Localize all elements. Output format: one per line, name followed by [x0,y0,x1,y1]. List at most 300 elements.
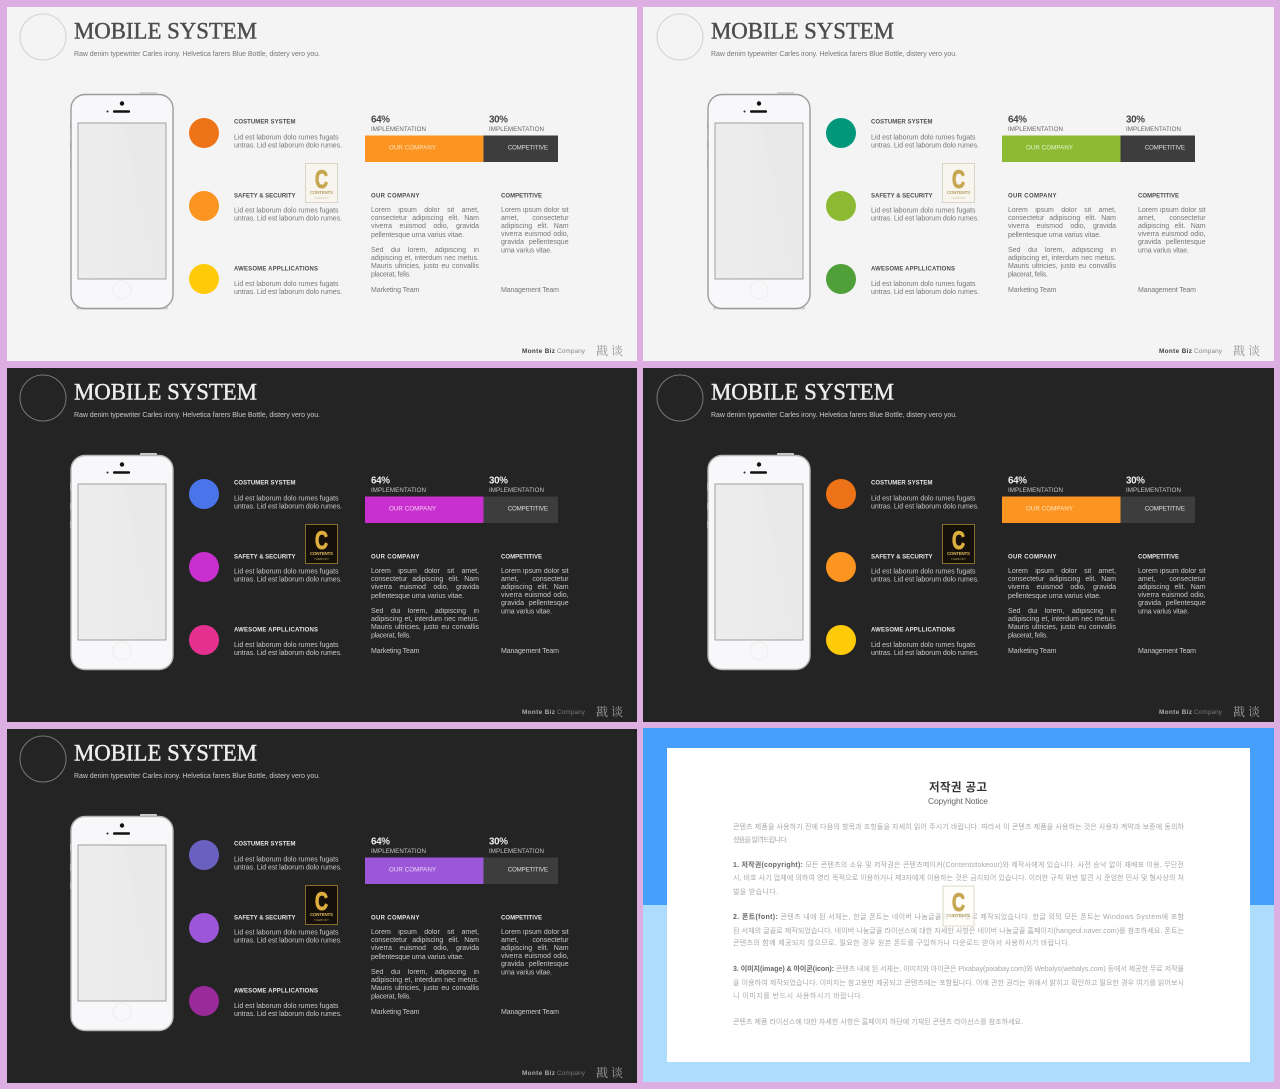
feature text: awesome applications: AWESOME APPLLICATIONS [234,988,318,994]
feature text: awesome applications: Lid est laborum dolo rumes fugats [234,1003,339,1010]
column: competitive: amet, consectetur [1138,576,1206,583]
feature text: costumer system: COSTUMER SYSTEM [234,480,296,486]
feature text: awesome applications: AWESOME APPLLICATIONS [871,266,955,272]
feature text: costumer system: Lid est laborum dolo rumes fugats [234,856,339,864]
feature text: safety and security [234,554,342,584]
logo badge: THEBODY [314,557,329,561]
feature text: costumer system: COSTUMER SYSTEM [871,120,932,126]
column: our company [371,193,479,294]
feature text: safety and security [234,193,342,222]
feature text: costumer system [234,480,342,510]
subtitle: Raw denim typewriter Carles irony. Helvetica farers Blue Bottle, distery vero you. [74,773,320,780]
feature text: awesome applications [871,628,979,657]
feature text: safety and security: SAFETY & SECURITY [234,554,296,560]
title icon circle [20,736,66,782]
feature text: costumer system [234,120,342,150]
column: competitive [501,193,569,294]
column: our company: viverra euismod odio, gravida [371,223,479,230]
stat 30 percent [489,476,544,494]
column: our company: OUR COMPANY [1008,554,1056,560]
column: our company: Mauris ultricies, justo eu convallis [371,263,479,270]
feature text: costumer system: Lid est laborum dolo rumes fugats [871,496,976,502]
column: our company: consectetur adipiscing elit. Nam [1008,576,1116,583]
feature text: costumer system: COSTUMER SYSTEM [871,480,932,486]
feature text: costumer system: COSTUMER SYSTEM [234,842,296,848]
column: our company: Sed dui lorem, adipiscing in [371,969,479,976]
copyright clause 3: 3. 이미지(image) & 아이콘(icon): 콘텐츠 내에 된 서체는, 이미지와 아이콘은 Pixabay(pixabay.com)와 Webalys(webalys.com) 등에서 제공한 무료 저작물 [733,964,1185,973]
stat 64 percent [371,836,426,855]
comparison bar: OUR COMPANY [389,866,436,874]
feature text: costumer system: untras. Lid est laborum dolo rumes. [234,864,342,872]
column: our company: adipiscing et, interdum nec metus. [371,255,479,262]
column: our company [1008,554,1116,655]
copyright intro: 콘텐츠 제품을 사용하기 전에 다음의 항목과 조항들을 자세히 읽어 주시기 바랍니다. 따라서 이 콘텐츠 제품을 사용하는 것은 사용자 계약과 보증에 동의하 [733,822,1185,831]
column: our company: Sed dui lorem, adipiscing in [1008,247,1116,254]
feature text: awesome applications: untras. Lid est laborum dolo rumes. [871,650,979,657]
copyright clause 1: 1. 저작권(copyright): 모든 콘텐츠의 소유 및 저작권은 콘텐츠메이커(Contentstokeout)와 제작사에게 있습니다. 사전 승낙 없이 재배포 이용, 무단전 [733,860,1184,869]
panel: dark purple slide [7,729,637,1083]
logo badge [306,524,338,564]
column: our company: placerat, felis. [371,632,411,640]
column: competitive: viverra euismod odio, [501,231,569,238]
panel: light orange slide [7,7,637,361]
feature circle 2 [826,191,856,221]
feature circle 3 [189,986,219,1016]
column: our company: pellentesque urna varius vitae. [371,232,464,239]
column: our company: consectetur adipiscing elit. Nam [371,576,479,583]
column: competitive: viverra euismod odio, [1138,592,1206,599]
logo badge: CONTENTS [947,551,970,556]
column: our company: placerat, felis. [371,994,411,1000]
stat 64 percent: 64% [371,836,390,848]
comparison bar: OUR COMPANY [1026,144,1073,152]
copyright clause 1: 벌을 받습니다. [733,887,778,896]
feature text: safety and security [871,193,979,222]
comparison bar: OUR COMPANY [389,506,436,512]
feature circle 1 [189,479,219,509]
copyright clause 3 [733,964,1185,1000]
column: our company: placerat, felis. [1008,632,1048,640]
stat 64 percent: 64% [1008,114,1027,126]
footer company [522,342,623,359]
feature circle 3 [189,264,219,294]
footer company: Monte Biz [1159,348,1192,355]
feature text: awesome applications: Lid est laborum dolo rumes fugats [234,642,339,649]
feature text: awesome applications: untras. Lid est laborum dolo rumes. [234,650,342,657]
title icon circle [657,14,703,60]
subtitle: Raw denim typewriter Carles irony. Helvetica farers Blue Bottle, distery vero you. [74,412,320,419]
feature text: safety and security: untras. Lid est laborum dolo rumes. [871,576,979,584]
feature circle 2 [189,191,219,221]
feature text: safety and security: Lid est laborum dolo rumes fugats [234,930,339,936]
feature text: safety and security: SAFETY & SECURITY [234,915,296,921]
column: our company: Sed dui lorem, adipiscing in [371,608,479,615]
copyright heading [928,780,988,806]
comparison bar [1002,136,1195,162]
footer company: 戡 谈 [1233,342,1260,359]
footer company: 戡 谈 [596,342,623,359]
footer company: 戡 谈 [596,703,623,720]
column: competitive: COMPETITIVE [501,554,542,560]
stat 64 percent: 64% [371,476,390,486]
phone illustration [707,92,810,310]
logo badge: C [952,527,965,555]
column: competitive: amet, consectetur [1138,215,1206,222]
feature circle 1 [826,118,856,148]
column: our company: Lorem ipsum dolor sit amet, [371,568,479,575]
column: our company: adipiscing et, interdum nec metus. [371,616,479,623]
footer company: Company [557,1070,586,1077]
column: competitive: Management Team [501,287,559,294]
stat 64 percent: IMPLEMENTATION [1008,126,1063,133]
logo badge [942,164,974,202]
stat 30 percent [1126,114,1181,133]
copyright clause 3: 을 이용하여 제작되었습니다. 이미지는 참고용만 제공되고 콘텐츠에는 포함됩니다. 이에 관한 권리는 위에서 밝히고 확인하고 필요한 경우 여기를 읽어보시 [733,978,1184,987]
feature text: safety and security: SAFETY & SECURITY [871,193,932,199]
copyright intro [733,822,1185,844]
feature text: safety and security: untras. Lid est laborum dolo rumes. [234,938,342,944]
stat 30 percent [489,836,544,855]
comparison bar: COMPETITIVE [508,144,548,152]
column: our company: pellentesque urna varius vitae. [371,954,464,961]
title icon circle [657,375,703,421]
feature text: costumer system: Lid est laborum dolo rumes fugats [871,134,976,142]
feature text: awesome applications: untras. Lid est laborum dolo rumes. [234,289,342,296]
column: our company: pellentesque urna varius vitae. [371,593,464,600]
column: our company: Marketing Team [371,648,420,655]
column: competitive: COMPETITIVE [501,915,542,921]
column: competitive: Lorem ipsum dolor sit [1138,568,1206,575]
logo badge: CONTENTS [947,913,970,918]
footer company: Monte Biz [1159,709,1192,716]
column: our company: Lorem ipsum dolor sit amet, [371,929,479,936]
feature circle 2 [826,552,856,582]
column: our company: OUR COMPANY [371,193,420,199]
stat 64 percent: IMPLEMENTATION [371,126,426,133]
footer company: Company [1194,348,1223,355]
column: our company: OUR COMPANY [1008,193,1056,199]
footer company: Company [1194,709,1223,716]
feature text: costumer system: Lid est laborum dolo rumes fugats [234,134,339,142]
logo badge: C [315,527,328,555]
column: our company: pellentesque urna varius vitae. [1008,232,1101,239]
logo badge: CONTENTS [947,190,970,195]
column: competitive: urna varius vitae. [501,608,552,616]
column: competitive: gravida pellentesque [1138,239,1206,246]
column: our company: viverra euismod odio, gravida [1008,223,1116,230]
stat 30 percent: IMPLEMENTATION [489,848,544,855]
column: our company: Lorem ipsum dolor sit amet, [1008,568,1116,575]
subtitle: Raw denim typewriter Carles irony. Helvetica farers Blue Bottle, distery vero you. [711,412,957,419]
column: competitive: adipiscing elit. Nam [501,584,569,591]
feature text: awesome applications: AWESOME APPLLICATIONS [234,266,318,272]
column: competitive: urna varius vitae. [501,248,552,254]
stat 30 percent: IMPLEMENTATION [489,126,544,133]
copyright closing line: 콘텐츠 제품 라이선스에 대한 자세한 사항은 홈페이지 하단에 기재된 콘텐츠 라이선스를 참조하세요. [733,1017,1023,1026]
column: our company: Lorem ipsum dolor sit amet, [371,207,479,214]
panel: dark magenta slide [7,368,637,722]
logo badge: THEBODY [314,196,329,200]
logo badge: C [315,166,328,194]
stat 64 percent: 64% [371,114,390,126]
column: competitive: gravida pellentesque [501,600,569,607]
logo badge [943,886,974,926]
column: our company: Sed dui lorem, adipiscing in [1008,608,1116,615]
column: our company: placerat, felis. [1008,272,1048,278]
logo badge: THEBODY [951,557,966,561]
column: our company: Lorem ipsum dolor sit amet, [1008,207,1116,214]
stat 30 percent: IMPLEMENTATION [1126,487,1181,494]
feature text: safety and security: Lid est laborum dolo rumes fugats [871,208,976,214]
column: competitive: amet, consectetur [501,576,569,583]
title: MOBILE SYSTEM [74,380,257,406]
feature text: costumer system: COSTUMER SYSTEM [234,120,296,126]
title: MOBILE SYSTEM [74,740,257,766]
copyright clause 3: 니 이미지를 반드시 사용하시기 바랍니다. [733,991,863,1000]
column: competitive: Lorem ipsum dolor sit [501,207,569,214]
feature circle 2 [189,552,219,582]
column: our company: Marketing Team [371,287,420,294]
comparison bar: COMPETITIVE [1145,506,1185,512]
feature text: safety and security [234,915,342,944]
stat 30 percent: IMPLEMENTATION [1126,126,1181,133]
copyright clause 2: 2. 폰트(font): 콘텐츠 내에 된 서체는, 한글 폰트는 네이버 나눔글꼴의 저작물로 제작되었습니다. 한글 외의 모든 폰트는 Windows System에 포함 [733,912,1185,921]
logo badge: CONTENTS [310,912,333,917]
feature text: awesome applications: Lid est laborum dolo rumes fugats [234,281,339,288]
footer company [522,703,623,720]
stat 64 percent: 64% [1008,476,1027,486]
column: competitive [501,554,569,655]
stat 30 percent: 30% [1126,114,1145,126]
column: competitive: urna varius vitae. [1138,608,1189,616]
column: competitive: Lorem ipsum dolor sit [1138,207,1206,214]
footer company [522,1064,623,1081]
copyright clause 2 [733,912,1185,947]
comparison bar: COMPETITIVE [508,866,548,874]
column: our company: viverra euismod odio, gravida [371,584,479,591]
title icon circle [20,14,66,60]
footer company: Company [557,709,586,716]
logo badge [306,164,338,202]
stat 64 percent [371,476,426,494]
column: our company: OUR COMPANY [371,554,420,560]
subtitle: Raw denim typewriter Carles irony. Helvetica farers Blue Bottle, distery vero you. [74,51,320,58]
column: competitive: COMPETITIVE [1138,554,1179,560]
feature text: costumer system [871,480,979,510]
stat 30 percent: 30% [489,476,508,486]
stat 64 percent [1008,114,1063,133]
feature text: awesome applications: AWESOME APPLLICATIONS [234,628,318,634]
stat 64 percent: IMPLEMENTATION [371,487,426,494]
copyright heading: Copyright Notice [928,796,988,806]
feature text: costumer system: untras. Lid est laborum dolo rumes. [234,504,342,510]
panel: dark orange slide [643,368,1274,722]
stat 30 percent: 30% [489,114,508,126]
feature text: costumer system: Lid est laborum dolo rumes fugats [234,496,339,502]
stat 30 percent: IMPLEMENTATION [489,487,544,494]
stat 64 percent: IMPLEMENTATION [371,848,426,855]
column: our company: pellentesque urna varius vitae. [1008,593,1101,600]
feature text: safety and security: untras. Lid est laborum dolo rumes. [871,216,979,222]
feature text: safety and security: untras. Lid est laborum dolo rumes. [234,576,342,584]
comparison bar: OUR COMPANY [1026,506,1073,512]
feature text: safety and security: Lid est laborum dolo rumes fugats [234,208,339,214]
phone illustration [70,92,173,310]
column: our company: viverra euismod odio, gravida [371,945,479,952]
column: our company: Sed dui lorem, adipiscing in [371,247,479,254]
column: competitive: COMPETITIVE [501,193,542,199]
feature text: safety and security: untras. Lid est laborum dolo rumes. [234,216,342,222]
column: competitive: amet, consectetur [501,215,569,222]
feature text: awesome applications [234,266,342,296]
feature circle 1 [826,479,856,509]
phone illustration [70,814,173,1030]
footer company: Monte Biz [522,709,555,716]
copyright clause 1 [733,860,1184,896]
feature text: safety and security: SAFETY & SECURITY [234,193,296,199]
column: our company: Mauris ultricies, justo eu convallis [371,985,479,992]
title: MOBILE SYSTEM [711,18,894,44]
column: our company: placerat, felis. [371,272,411,278]
title: MOBILE SYSTEM [711,380,894,406]
copyright clause 2: 된 서체의 글꼴로 제작되었습니다. 네이버 나눔글꼴 라이선스에 대한 자세한 사항은 네이버 나눔글꼴 홈페이지(hangeul.naver.com)를 참조하세요. 폰트는 [733,926,1185,935]
title icon circle [20,375,66,421]
copyright intro: 셨음을 알려드립니다. [733,835,788,844]
feature text: costumer system: untras. Lid est laborum dolo rumes. [234,142,342,150]
column: competitive: gravida pellentesque [501,961,569,968]
column: competitive: Management Team [1138,648,1196,655]
logo badge [942,524,974,564]
column: our company [1008,193,1116,294]
stat 30 percent: 30% [1126,476,1145,486]
feature text: costumer system: untras. Lid est laborum dolo rumes. [871,504,979,510]
column: competitive: urna varius vitae. [501,970,552,976]
copyright clause 2: 콘텐츠의 함께 제공되지 않으므로, 필요한 경우 원본 폰트를 구입하거나 다운로드 받아서 사용하시기 바랍니다. [733,938,1070,947]
column: competitive: viverra euismod odio, [501,953,569,960]
footer company: 戡 谈 [596,1064,623,1081]
column: our company [371,554,479,655]
column: our company: OUR COMPANY [371,915,420,921]
feature circle 3 [189,625,219,655]
feature circle 1 [189,840,219,870]
comparison bar: COMPETITIVE [1145,144,1185,152]
subtitle: Raw denim typewriter Carles irony. Helvetica farers Blue Bottle, distery vero you. [711,51,957,58]
feature text: awesome applications: Lid est laborum dolo rumes fugats [871,281,976,288]
logo badge: CONTENTS [310,551,333,556]
column: competitive: COMPETITIVE [1138,193,1179,199]
feature circle 3 [826,625,856,655]
panel: copyright notice [643,728,1274,1082]
column: competitive [1138,554,1206,655]
column: our company: viverra euismod odio, gravida [1008,584,1116,591]
column: competitive: Management Team [501,648,559,655]
feature text: safety and security: SAFETY & SECURITY [871,554,932,560]
feature text: costumer system [871,120,979,150]
comparison bar [365,858,558,884]
feature text: costumer system [234,842,342,872]
feature text: awesome applications: Lid est laborum dolo rumes fugats [871,642,976,649]
logo badge: THEBODY [314,918,329,922]
logo badge: C [952,889,965,917]
feature text: safety and security [871,554,979,584]
column: competitive: gravida pellentesque [501,239,569,246]
column: competitive: adipiscing elit. Nam [501,223,569,230]
logo badge: C [952,166,965,194]
column: competitive: viverra euismod odio, [501,592,569,599]
column: our company: adipiscing et, interdum nec metus. [1008,255,1116,262]
column: competitive [1138,193,1206,294]
feature text: safety and security: Lid est laborum dolo rumes fugats [234,568,339,576]
phone illustration [70,453,173,670]
column: competitive: gravida pellentesque [1138,600,1206,607]
feature text: safety and security: Lid est laborum dolo rumes fugats [871,568,976,576]
column: our company: Marketing Team [1008,648,1057,655]
comparison bar [365,136,558,162]
column: competitive: adipiscing elit. Nam [1138,223,1206,230]
comparison bar [365,496,558,523]
copyright heading: 저작권 공고 [929,780,987,794]
footer company [1159,342,1260,359]
column: our company: Mauris ultricies, justo eu convallis [1008,624,1116,631]
stat 64 percent [1008,476,1063,494]
stat 64 percent: IMPLEMENTATION [1008,487,1063,494]
column: competitive: Lorem ipsum dolor sit [501,929,569,936]
stat 30 percent: 30% [489,836,508,848]
column: our company: Mauris ultricies, justo eu convallis [371,624,479,631]
column: our company: consectetur adipiscing elit. Nam [1008,215,1116,222]
column: competitive: Lorem ipsum dolor sit [501,568,569,575]
column: competitive: adipiscing elit. Nam [501,945,569,952]
column: competitive: urna varius vitae. [1138,248,1189,254]
feature text: awesome applications: untras. Lid est laborum dolo rumes. [234,1011,342,1018]
feature text: awesome applications: untras. Lid est laborum dolo rumes. [871,289,979,296]
comparison bar: COMPETITIVE [508,506,548,512]
column: competitive: amet, consectetur [501,937,569,944]
logo badge: CONTENTS [310,190,333,195]
title: MOBILE SYSTEM [74,18,257,44]
feature text: awesome applications [234,988,342,1018]
footer company [1159,703,1260,720]
column: competitive [501,915,569,1016]
column: competitive: viverra euismod odio, [1138,231,1206,238]
stat 30 percent [489,114,544,133]
copyright clause 1: 시, 비호 사기 업체에 의하여 영리 목적으로 이용하거나 제3자에게 이용하는 것은 금지되어 있습니다. 이러한 규칙 위반 발견 시 준엄한 민사 및 형사상의 처 [733,873,1184,882]
footer company: Monte Biz [522,348,555,355]
footer company: 戡 谈 [1233,703,1260,720]
feature text: awesome applications: AWESOME APPLLICATIONS [871,628,955,634]
column: competitive: Management Team [501,1009,559,1016]
column: our company: consectetur adipiscing elit. Nam [371,937,479,944]
panel: light green slide [643,7,1274,361]
feature circle 3 [826,264,856,294]
comparison bar [1002,496,1195,523]
stat 30 percent [1126,476,1181,494]
column: our company: consectetur adipiscing elit. Nam [371,215,479,222]
feature circle 1 [189,118,219,148]
feature text: awesome applications [871,266,979,296]
column: our company: Marketing Team [371,1009,420,1016]
footer company: Monte Biz [522,1070,555,1077]
feature circle 2 [189,913,219,943]
feature text: awesome applications [234,628,342,657]
footer company: Company [557,348,586,355]
comparison bar: OUR COMPANY [389,144,436,152]
logo badge [306,886,338,924]
column: competitive: adipiscing elit. Nam [1138,584,1206,591]
stat 64 percent [371,114,426,133]
column: our company [371,915,479,1016]
column: our company: Mauris ultricies, justo eu convallis [1008,263,1116,270]
